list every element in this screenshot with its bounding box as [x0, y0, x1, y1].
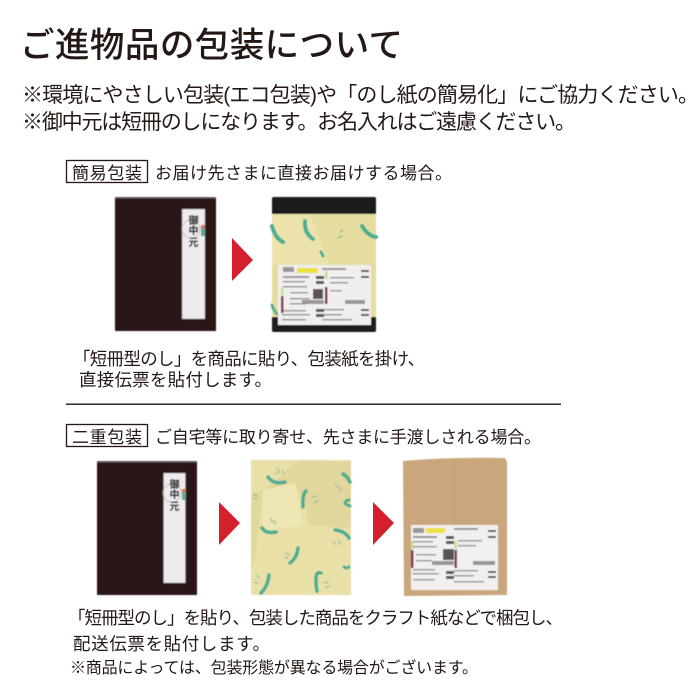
panel: simple wrapping: [66, 160, 452, 390]
panel: double wrapping: [66, 424, 563, 677]
product box with tanzaku noshi: 元: [170, 501, 180, 513]
intro notes: [22, 84, 699, 134]
caption: double wrapping: [68, 608, 563, 654]
product box with tanzaku noshi: 中: [188, 224, 198, 237]
heading: simple wrapping: お届け先さまに直接お届けする場合。: [155, 164, 452, 183]
wrapped box with shipping label: [272, 197, 376, 332]
caption: simple wrapping: 「短冊型のし」を商品に貼り、包装紙を掛け、: [73, 349, 425, 369]
caption: simple wrapping: 直接伝票を貼付します。: [79, 370, 272, 390]
footnote: ※商品によっては、包装形態が異なる場合がございます。: [70, 658, 478, 677]
product box with tanzaku noshi: 元: [188, 237, 198, 249]
product box with tanzaku noshi: 御: [170, 478, 180, 491]
heading: double wrapping: 二重包装: [72, 428, 142, 447]
product box with tanzaku noshi: 御: [188, 214, 198, 227]
title: ご進物品の包装について: [20, 27, 403, 65]
heading: double wrapping: ご自宅等に取り寄せ、先さまに手渡しされる場合。: [155, 428, 541, 447]
wrapped gift paper: [251, 460, 351, 595]
heading: simple wrapping: 簡易包装: [72, 164, 142, 183]
product box with tanzaku noshi: [115, 197, 216, 331]
product box with tanzaku noshi: 中: [170, 488, 180, 501]
heading: double wrapping: [66, 424, 541, 447]
kraft parcel with shipping label: [403, 458, 507, 596]
caption: simple wrapping: [73, 349, 425, 390]
arrow: [219, 502, 240, 545]
intro notes: ※御中元は短冊のしになります。お名入れはご遠慮ください。: [22, 111, 576, 134]
arrow: [373, 502, 394, 545]
caption: double wrapping: 配送伝票を貼付します。: [73, 634, 270, 654]
heading: simple wrapping: [66, 160, 452, 183]
intro notes: ※環境にやさしい包装(エコ包装)や「のし紙の簡易化」にご協力ください。: [22, 84, 699, 107]
caption: double wrapping: 「短冊型のし」を貼り、包装した商品をクラフト紙などで梱包し、: [68, 608, 563, 628]
product box with tanzaku noshi: [97, 461, 197, 595]
arrow: [232, 238, 253, 281]
